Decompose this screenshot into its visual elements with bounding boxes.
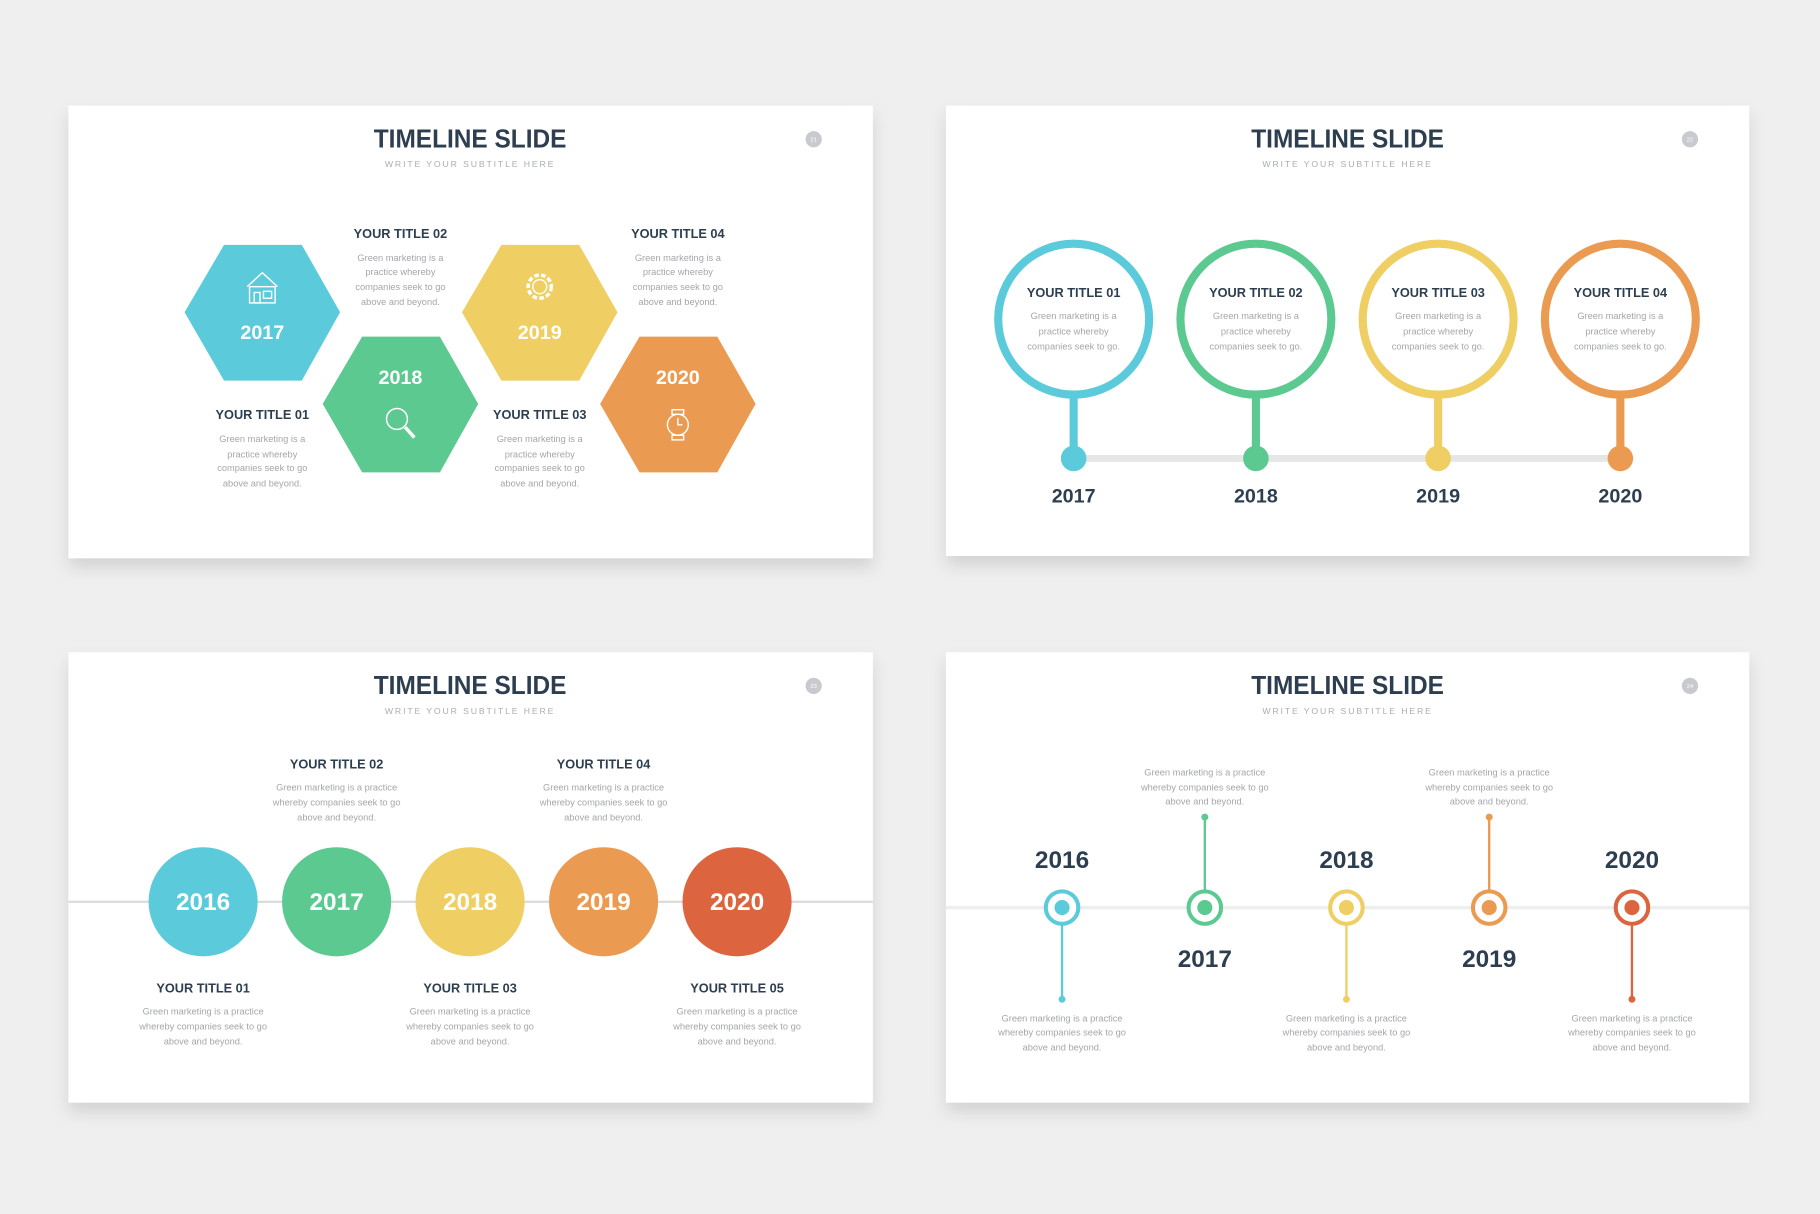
text block: title 05: above and beyond. [698,1037,776,1047]
circle 2018 [416,847,525,956]
marker 2020: above and beyond. [1593,1042,1671,1052]
pin 2020: Green marketing is a [1577,311,1664,321]
text block: title 03: YOUR TITLE 03 [423,980,517,995]
text block: title 02: above and beyond. [297,813,376,823]
pin 2018: companies seek to go. [1210,341,1302,351]
pin 2020 [1545,244,1696,508]
pin 2020: companies seek to go. [1574,341,1667,351]
circle 2019 [549,847,658,956]
text block: title 05: whereby companies seek to go [672,1021,801,1031]
text block: title 02: Green marketing is a [357,253,444,263]
hexagon 2019 [462,245,618,381]
marker 2016: Green marketing is a practice [1002,1013,1123,1023]
marker 2020: Green marketing is a practice [1571,1013,1692,1023]
panel: slide 2 circle pins [946,106,1749,556]
text block: title 02 [354,226,447,307]
title: TIMELINE SLIDE [1251,672,1444,700]
text block: title 01 [216,407,309,488]
text block: title 03: Green marketing is a practice [410,1006,531,1016]
marker 2019: Green marketing is a practice [1429,767,1550,777]
page number [806,678,822,694]
hexagon 2019: 2019 [518,322,562,344]
text block: title 01 [138,980,267,1047]
text block: title 05: Green marketing is a practice [677,1006,798,1016]
marker 2019 [1424,767,1553,973]
marker 2016: above and beyond. [1023,1042,1101,1052]
subtitle: WRITE YOUR SUBTITLE HERE [1262,159,1433,169]
text block: title 05: YOUR TITLE 05 [690,980,784,995]
text block: title 04: practice whereby [643,267,713,277]
text block: title 02: practice whereby [365,267,436,277]
text block: title 02: YOUR TITLE 02 [290,756,383,771]
text block: title 03: whereby companies seek to go [405,1021,534,1031]
marker 2016: 2016 [1035,847,1089,874]
text block: title 03: above and beyond. [500,478,579,488]
pin 2018: practice whereby [1221,326,1291,336]
marker 2017 [1140,767,1269,973]
hexagon 2017: 2017 [240,322,284,344]
pin 2018 [1180,244,1331,508]
text block: title 01: YOUR TITLE 01 [216,407,309,422]
marker 2020 [1567,847,1696,1052]
text block: title 04: companies seek to go [633,282,723,292]
marker 2017: above and beyond. [1165,796,1244,806]
page number [1682,678,1698,694]
pin 2019: YOUR TITLE 03 [1391,285,1485,300]
title: TIMELINE SLIDE [374,125,566,153]
marker 2018 [1282,847,1410,1052]
pin 2017: YOUR TITLE 01 [1027,285,1120,300]
pin 2017: companies seek to go. [1027,341,1120,351]
pin 2018: Green marketing is a [1213,311,1300,321]
pin 2017 [998,244,1149,508]
page number: 22 [1687,138,1693,144]
circle 2018: 2018 [443,889,497,916]
pin 2020: YOUR TITLE 04 [1574,285,1668,300]
pin 2020: 2020 [1598,486,1642,508]
text block: title 03: companies seek to go [495,463,585,473]
pin 2019: Green marketing is a [1395,311,1482,321]
title: TIMELINE SLIDE [374,672,566,700]
text block: title 03: practice whereby [505,449,575,459]
text block: title 03 [493,407,586,488]
marker 2016: whereby companies seek to go [997,1027,1126,1037]
text block: title 01: above and beyond. [223,478,302,488]
marker 2020: whereby companies seek to go [1567,1027,1696,1037]
circle 2016: 2016 [176,889,230,916]
text block: title 04: above and beyond. [638,297,717,307]
text block: title 02: Green marketing is a practice [276,782,397,792]
hexagon 2018: 2018 [379,367,422,389]
text block: title 04: Green marketing is a [635,253,722,263]
pin 2017: 2017 [1052,486,1096,508]
hexagon 2017 [185,245,340,381]
pin 2017: practice whereby [1039,326,1109,336]
title: TIMELINE SLIDE [1251,125,1444,153]
hexagon 2018 [323,337,478,472]
circle 2020: 2020 [710,889,764,916]
text block: title 03 [405,980,534,1047]
text block: title 04: YOUR TITLE 04 [557,756,651,771]
marker 2017: 2017 [1178,946,1232,973]
marker 2019: above and beyond. [1450,796,1529,806]
circle 2017 [282,847,391,956]
circle 2019: 2019 [576,889,631,916]
marker 2018: 2018 [1319,847,1374,874]
text block: title 01: YOUR TITLE 01 [156,980,250,995]
hexagon 2020 [600,337,756,472]
pin 2019: companies seek to go. [1392,341,1484,351]
marker 2018: whereby companies seek to go [1282,1027,1410,1037]
text block: title 04: YOUR TITLE 04 [631,226,726,241]
pin 2017: Green marketing is a [1031,311,1118,321]
pin 2019: 2019 [1416,486,1460,508]
pin 2018: YOUR TITLE 02 [1209,285,1303,300]
marker 2019: 2019 [1462,946,1516,973]
text block: title 05 [672,980,801,1047]
text block: title 01: Green marketing is a practice [143,1006,264,1016]
text block: title 01: above and beyond. [164,1037,243,1047]
panel: slide 1 hexagon timeline [68,106,873,558]
text block: title 01: Green marketing is a [219,434,306,444]
page number [1682,131,1698,147]
pin 2019: practice whereby [1403,326,1474,336]
pin 2018: 2018 [1234,486,1278,508]
text block: title 01: whereby companies seek to go [138,1021,267,1031]
text block: title 02: above and beyond. [361,297,440,307]
text block: title 04: Green marketing is a practice [543,782,664,792]
text block: title 03: above and beyond. [431,1037,510,1047]
pin 2020: practice whereby [1585,326,1656,336]
page number [806,131,822,147]
text block: title 04: whereby companies seek to go [539,797,667,807]
text block: title 04 [631,226,726,307]
marker 2020: 2020 [1605,847,1659,874]
text block: title 02: whereby companies seek to go [272,797,400,807]
marker 2018: Green marketing is a practice [1286,1013,1407,1023]
pin 2019 [1363,244,1514,508]
marker 2016 [997,847,1126,1052]
text block: title 02: YOUR TITLE 02 [354,226,447,241]
text block: title 03: Green marketing is a [497,434,584,444]
text block: title 02: companies seek to go [355,282,446,292]
panel: slide 4 target timeline [946,652,1749,1103]
marker 2017: Green marketing is a practice [1144,767,1265,777]
subtitle: WRITE YOUR SUBTITLE HERE [1262,706,1433,716]
panel: slide 3 circle row [68,652,873,1103]
marker 2019: whereby companies seek to go [1424,782,1553,792]
text block: title 02 [272,756,400,823]
hexagon 2020: 2020 [656,367,700,389]
page number: 24 [1687,684,1694,690]
text block: title 04 [539,756,667,823]
text block: title 01: companies seek to go [217,463,307,473]
circle 2020 [682,847,792,956]
text block: title 01: practice whereby [227,449,298,459]
page number: 21 [810,138,817,144]
marker 2018: above and beyond. [1307,1042,1386,1052]
marker 2017: whereby companies seek to go [1140,782,1269,792]
circle 2017: 2017 [310,889,364,916]
text block: title 03: YOUR TITLE 03 [493,407,586,422]
subtitle: WRITE YOUR SUBTITLE HERE [385,706,555,716]
text block: title 04: above and beyond. [564,813,643,823]
subtitle: WRITE YOUR SUBTITLE HERE [385,159,555,169]
page number: 23 [810,684,817,690]
circle 2016 [149,847,258,956]
